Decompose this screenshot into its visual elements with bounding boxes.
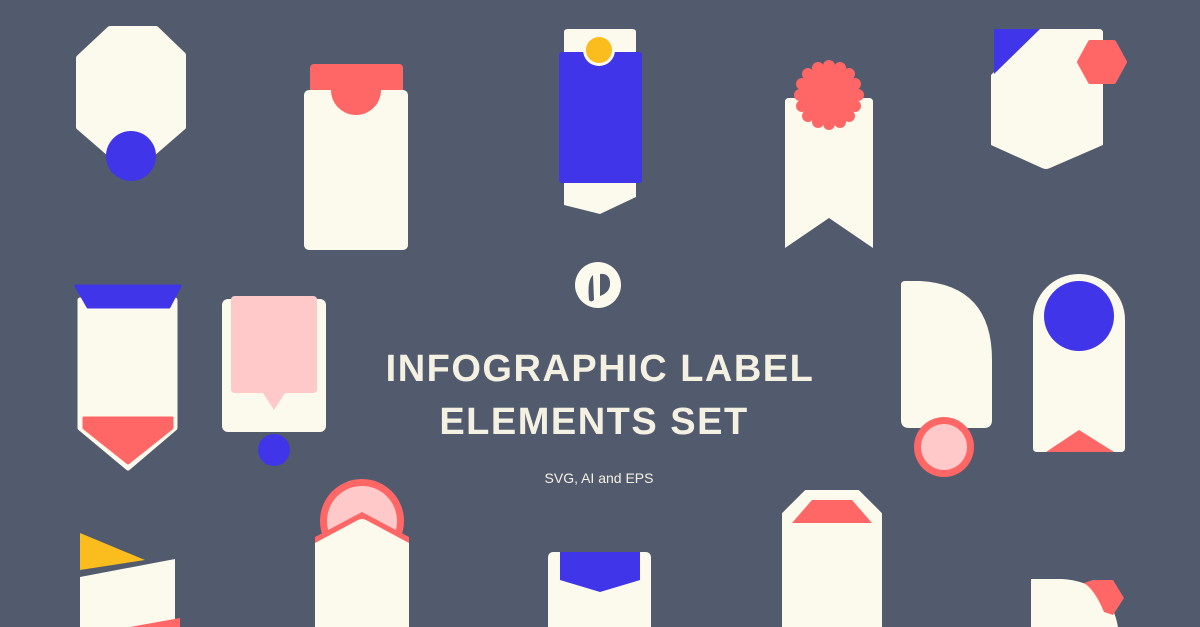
title <box>386 348 814 443</box>
label: D shape with pink dot <box>901 281 992 477</box>
label: logo <box>575 262 621 308</box>
title: ELEMENTS SET <box>439 401 749 443</box>
label: octagon with blue dot <box>79 29 183 181</box>
label: chamfered tag bottom <box>784 492 880 627</box>
label: bottom right D <box>1031 579 1124 627</box>
label: hexagon card top right <box>991 29 1125 169</box>
label: bottom blue pocket <box>548 552 651 627</box>
label: ribbon with starburst <box>785 60 873 248</box>
subtitle: SVG, AI and EPS <box>545 470 653 486</box>
label: pentagon with red circle <box>315 479 409 627</box>
label: capsule with blue circle <box>1033 274 1125 452</box>
label: card with red tab <box>304 64 408 250</box>
label: yellow flag bottom left <box>80 533 180 627</box>
label: blue pocket label <box>559 29 642 214</box>
label: arrow tag with blue top <box>76 286 180 468</box>
title: INFOGRAPHIC LABEL <box>386 348 814 390</box>
label: speech bubble card <box>222 296 326 466</box>
